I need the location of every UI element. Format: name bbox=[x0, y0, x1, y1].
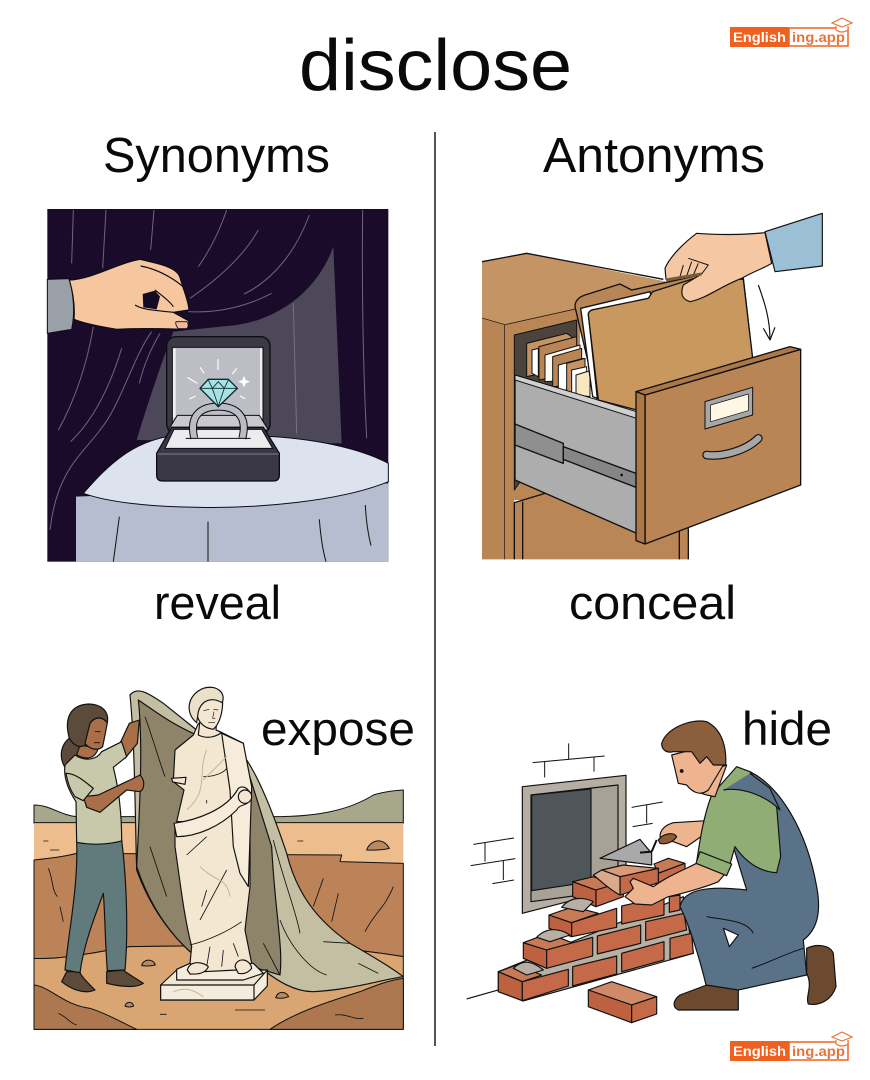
robe bbox=[175, 787, 252, 972]
label: reveal: reveal bbox=[154, 576, 281, 629]
arrow bbox=[758, 285, 775, 340]
overalls bbox=[680, 772, 819, 990]
back wall bbox=[137, 247, 342, 443]
shoes bbox=[62, 970, 143, 992]
heading: synonyms: Synonyms bbox=[103, 129, 330, 183]
second row bbox=[523, 943, 547, 968]
rocks and cracks bbox=[125, 841, 389, 1007]
drawer opening bbox=[514, 320, 577, 490]
pit wall bbox=[34, 853, 403, 959]
torso bbox=[173, 723, 250, 822]
logo: top: ing.app bbox=[792, 29, 845, 45]
illustration: woman unveiling statue at excavation bbox=[34, 687, 403, 1029]
label: expose: expose bbox=[261, 702, 415, 755]
ground bbox=[34, 823, 403, 1029]
bottom row bbox=[498, 972, 522, 1001]
window frame bbox=[522, 775, 626, 913]
brick wall bbox=[498, 858, 693, 1001]
logo: bottom bbox=[730, 1032, 852, 1061]
trousers bbox=[65, 840, 127, 973]
sleeve bbox=[66, 773, 93, 801]
mortar bbox=[513, 898, 593, 975]
boots bbox=[807, 946, 836, 1004]
loose brick bbox=[588, 982, 657, 1023]
logo: bottom: English bbox=[733, 1043, 786, 1059]
illustration: hand filing folder in cabinet drawer bbox=[482, 213, 822, 559]
cabinet sides bbox=[482, 318, 505, 559]
near arm bbox=[625, 863, 728, 905]
lowered arm bbox=[83, 775, 144, 812]
raised arm bbox=[120, 720, 139, 758]
curtain folds bbox=[50, 210, 367, 530]
marble veins bbox=[173, 750, 230, 997]
shirt bbox=[697, 767, 781, 873]
center divider bbox=[434, 132, 436, 1046]
logo: bottom: ing.app bbox=[792, 1043, 845, 1059]
lower drawer bbox=[514, 493, 688, 559]
logo: top: English bbox=[733, 29, 786, 45]
third row bbox=[549, 915, 572, 937]
hand bbox=[665, 233, 772, 302]
shirt bbox=[65, 742, 127, 844]
title: disclose bbox=[299, 26, 572, 106]
hand bbox=[69, 259, 189, 329]
far arm with trowel bbox=[660, 821, 707, 847]
logo: top bbox=[730, 18, 852, 47]
sleeve bbox=[765, 213, 822, 272]
illustration: hand revealing diamond ring behind curtain bbox=[47, 209, 388, 562]
neck and head bbox=[695, 765, 727, 797]
statue bbox=[161, 687, 267, 1000]
top row bbox=[573, 882, 596, 907]
heading: antonyms: Antonyms bbox=[543, 129, 765, 183]
face bbox=[85, 718, 107, 749]
woman bbox=[61, 704, 144, 992]
head bbox=[198, 720, 222, 737]
diamond bbox=[200, 379, 237, 407]
feet bbox=[187, 960, 252, 974]
drawer front bbox=[636, 347, 801, 544]
label: conceal: conceal bbox=[569, 576, 736, 629]
base bbox=[161, 970, 267, 1000]
large folder bbox=[575, 275, 753, 410]
back folders bbox=[527, 333, 590, 397]
cabinet top bbox=[482, 253, 667, 325]
wall brick sketch lines bbox=[471, 743, 663, 884]
sparkles bbox=[187, 359, 245, 399]
label: hide: hide bbox=[742, 702, 832, 755]
pit floor bbox=[34, 945, 403, 1029]
sleeve bbox=[47, 279, 74, 333]
gap between legs bbox=[723, 928, 738, 947]
held brick bbox=[620, 868, 658, 895]
hair bbox=[67, 704, 108, 746]
table bbox=[76, 435, 388, 562]
distant hills bbox=[34, 790, 403, 823]
cloth bbox=[130, 691, 403, 992]
ring box bbox=[157, 337, 279, 481]
neck bbox=[77, 745, 98, 758]
worker bbox=[600, 721, 836, 1010]
ponytail bbox=[61, 737, 82, 767]
drawer side rails bbox=[515, 375, 637, 533]
illustration: man bricking up window bbox=[467, 721, 836, 1023]
ring band bbox=[193, 407, 244, 438]
